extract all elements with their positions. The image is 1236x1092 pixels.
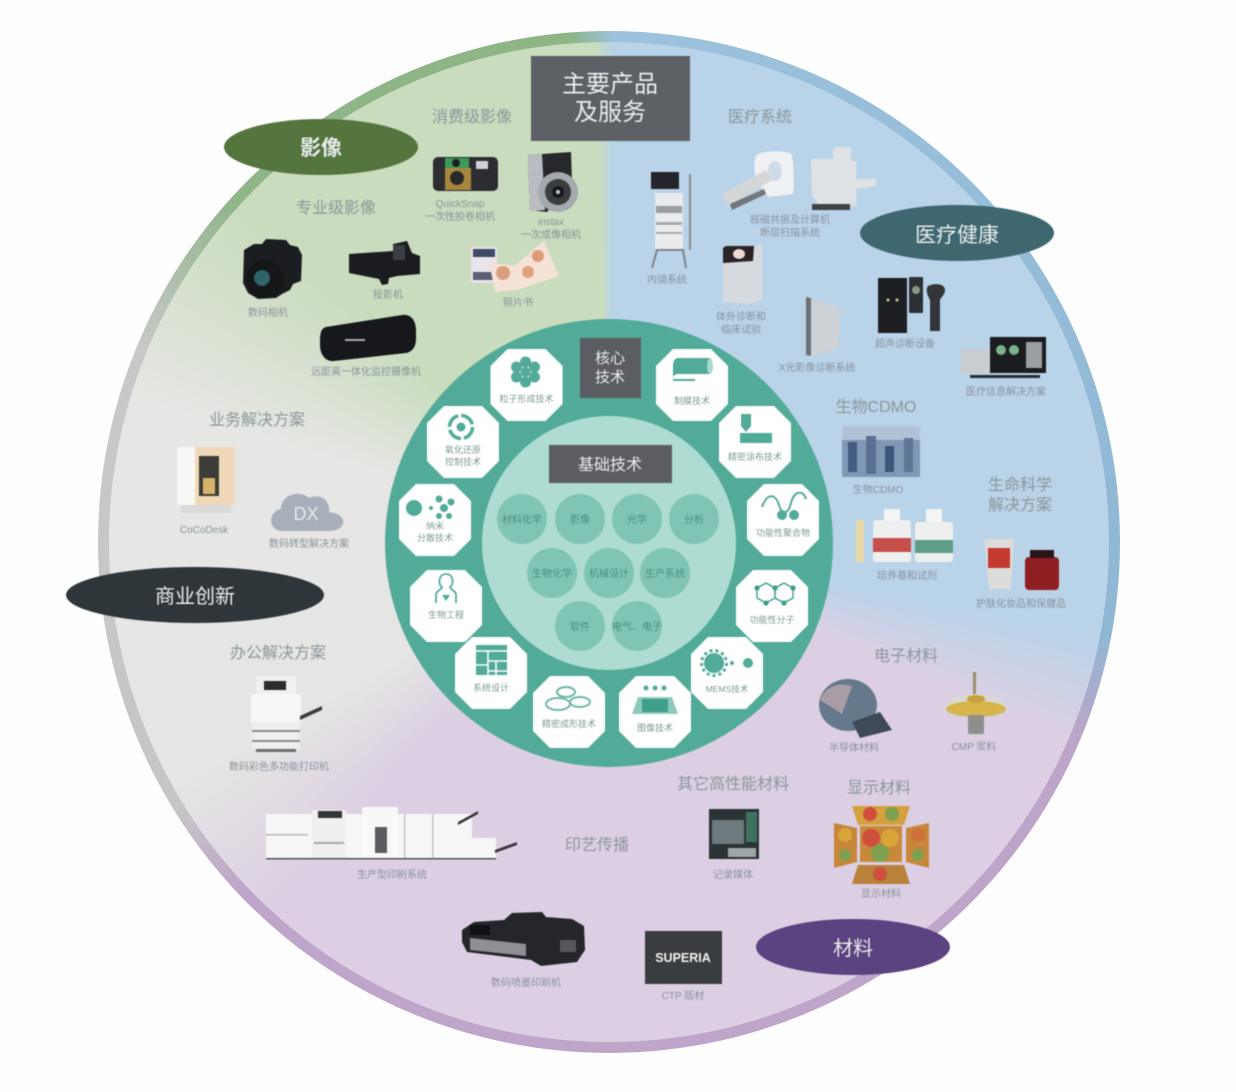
pill: imaging [224, 119, 418, 175]
label: CMP: CMP 浆料 [952, 740, 996, 753]
panel: business innovation sector [177, 411, 349, 773]
label: display material: 显示材料 [861, 887, 901, 900]
label: instant camera: 一次成像相机 [521, 228, 581, 241]
icon: photo book [471, 241, 559, 292]
outer ring [98, 31, 1120, 1053]
circle: analysis [669, 494, 719, 544]
icon: ultrasound [878, 277, 945, 333]
icon: CoCoDesk booth [177, 447, 235, 513]
label: surveillance camera: 远距离一体化监控摄像机 [311, 365, 421, 378]
icon: projector [349, 241, 420, 285]
icon: office printer [251, 676, 322, 752]
circle: electrical electronic [612, 601, 662, 651]
core tech title: 技术 [595, 369, 625, 386]
circle: analysis: 分析 [684, 513, 704, 526]
label: ultrasound: 超声诊断设备 [875, 337, 935, 350]
panel: healthcare sector [647, 108, 1066, 610]
title box [531, 56, 690, 141]
circle: production system [640, 548, 690, 598]
tile: system design: 系统设计 [473, 682, 509, 693]
tile: precision coating: 精密涂布技术 [728, 451, 782, 462]
panel: materials sector [266, 647, 1006, 1002]
tile: film forming: 制膜技术 [674, 395, 710, 406]
tile: precision forming [533, 676, 605, 748]
circle: optics: 光学 [627, 513, 647, 526]
pill: business innovation [66, 567, 324, 623]
label: endoscope: 内镜系统 [647, 273, 687, 286]
label: CDMO: 生物CDMO [853, 483, 903, 496]
label: QuickSnap: QuickSnap [436, 199, 485, 210]
tile: functional polymer: 功能性聚合物 [756, 527, 810, 538]
label: semiconductor: 半导体材料 [829, 741, 879, 754]
heading: life sciences [988, 476, 1052, 514]
label: DX: 数码转型解决方案 [269, 537, 349, 550]
tile: MEMS: MEMS技术 [706, 684, 749, 694]
title box: 主要产品 [562, 71, 658, 98]
sector background [109, 42, 1109, 1042]
circle: electrical electronic: 电气、电子 [612, 620, 662, 633]
tile: nano dispersion: 纳米 [426, 520, 444, 531]
core tech title: 核心 [595, 350, 625, 367]
heading: medical systems: 医疗系统 [728, 108, 792, 126]
tile: functional polymer [747, 484, 819, 556]
icon: DX cloud [271, 494, 343, 531]
pill: healthcare: 医疗健康 [915, 224, 999, 247]
tile: bioengineering: 生物工程 [428, 609, 464, 620]
panel: imaging sector [243, 108, 581, 378]
tile: redox control [427, 406, 499, 478]
tile: functional molecule [736, 570, 808, 642]
label: CT MRI: 核磁共振及计算机 [750, 213, 830, 226]
label: medical IT: 医疗信息解决方案 [966, 385, 1046, 398]
tile: precision coating [719, 406, 791, 478]
label: digital press: 数码喷墨印刷机 [491, 976, 561, 989]
pill: business innovation: 商业创新 [155, 585, 235, 608]
heading: graphic communication: 印艺传播 [565, 836, 629, 854]
circle: mechanical design [584, 548, 634, 598]
icon: digital camera [243, 239, 302, 299]
base tech title: 基础技术 [578, 456, 642, 474]
label: CT MRI [750, 213, 830, 239]
tile: precision forming: 精密成形技术 [542, 718, 596, 729]
label: instax: instax [538, 217, 564, 228]
base tech title [549, 445, 672, 483]
label: recording media: 记录媒体 [713, 869, 753, 881]
label: CT MRI: 断层扫描系统 [760, 226, 820, 239]
icon: surveillance camera [320, 315, 416, 361]
icon: in vitro diagnostics [723, 244, 762, 304]
tile: redox control: 控制技术 [445, 456, 481, 467]
icon: SUPERIA plate [645, 931, 722, 984]
tile: particle formation [490, 349, 562, 421]
circle: biochemistry [527, 548, 577, 598]
circle: software: 软件 [570, 620, 590, 633]
icon: instax camera [528, 152, 578, 212]
label: in vitro diagnostics [716, 310, 766, 336]
circle: mechanical design: 机械设计 [589, 567, 629, 580]
tile: particle formation: 粒子形成技术 [499, 393, 554, 404]
tile: film forming [656, 349, 728, 421]
icon: medical IT monitors [961, 337, 1046, 378]
heading: life sciences: 生命科学 [988, 476, 1052, 494]
icon: CT scanner [722, 151, 794, 210]
pill: healthcare [860, 205, 1054, 261]
heading: bio CDMO: 生物CDMO [836, 398, 916, 416]
pill: imaging: 影像 [300, 137, 342, 160]
icon: culture media [856, 509, 953, 562]
label: in vitro diagnostics: 临床试验 [721, 323, 761, 336]
base technology disc [482, 416, 736, 670]
icon: semiconductor wafer [819, 679, 892, 738]
circle: optics [612, 494, 662, 544]
heading: other materials: 其它高性能材料 [677, 775, 789, 793]
icon: cosmetics [984, 539, 1059, 590]
label: projector: 投影机 [373, 288, 403, 301]
title box: 及服务 [574, 99, 646, 126]
label: digital camera: 数码相机 [248, 306, 288, 319]
heading: office solutions: 办公解决方案 [230, 644, 326, 662]
icon: CDMO factory [842, 426, 920, 477]
icon: QuickSnap camera [433, 157, 498, 191]
circle: imaging [555, 494, 605, 544]
icon: SUPERIA plate: SUPERIA [655, 951, 711, 965]
icon: endoscope cart [651, 172, 691, 268]
icon: CMP slurry [946, 672, 1006, 734]
icon: production printer [266, 807, 517, 860]
label: X-ray: X光影像诊断系统 [779, 361, 855, 374]
pill: materials [756, 919, 950, 975]
heading: consumer imaging: 消费级影像 [432, 108, 512, 126]
circle: material chemistry [497, 494, 547, 544]
label: photo book: 照片书 [503, 296, 533, 309]
tile: nano dispersion [399, 484, 471, 556]
heading: electronic materials: 电子材料 [874, 647, 938, 665]
tile: functional molecule: 功能性分子 [749, 614, 795, 625]
label: production printer: 生产型印刷系统 [357, 868, 427, 881]
icon: recording media [709, 809, 759, 859]
core tech title [580, 338, 641, 398]
label: disposable camera: 一次性胶卷相机 [425, 210, 495, 223]
tile: MEMS [691, 637, 763, 709]
heading: display materials: 显示材料 [847, 779, 911, 797]
label: cosmetics: 护肤化妆品和保健品 [976, 597, 1066, 610]
label: CTP: CTP 版材 [662, 989, 704, 1002]
label: in vitro diagnostics: 体外诊断和 [716, 310, 766, 323]
heading: professional imaging: 专业级影像 [296, 199, 376, 217]
circle: software [555, 601, 605, 651]
tile: imaging technology: 图像技术 [637, 722, 673, 733]
tile: redox control: 氧化还原 [445, 444, 481, 455]
icon: digital press [462, 912, 585, 966]
icon: DX cloud: DX [293, 504, 319, 524]
circle: biochemistry: 生物化学 [532, 567, 572, 580]
icon: display panels [834, 806, 929, 884]
tile: bioengineering [410, 570, 482, 642]
core technology disc [385, 319, 833, 767]
circle: production system: 生产系统 [645, 567, 685, 580]
tile: system design [455, 637, 527, 709]
label: office printer: 数码彩色多功能打印机 [229, 760, 329, 773]
heading: business solutions: 业务解决方案 [209, 411, 305, 429]
tile: nano dispersion: 分散技术 [417, 532, 453, 543]
label: CoCoDesk: CoCoDesk [180, 525, 229, 536]
heading: life sciences: 解决方案 [988, 496, 1052, 514]
pill: materials: 材料 [833, 937, 873, 960]
circle: material chemistry: 材料化学 [502, 513, 542, 526]
circle: imaging: 影像 [570, 514, 590, 526]
label: media reagents: 培养基和试剂 [877, 569, 937, 582]
icon: X-ray panel [806, 297, 840, 357]
tile: imaging technology [619, 676, 691, 748]
icon: X-ray table [811, 147, 876, 210]
